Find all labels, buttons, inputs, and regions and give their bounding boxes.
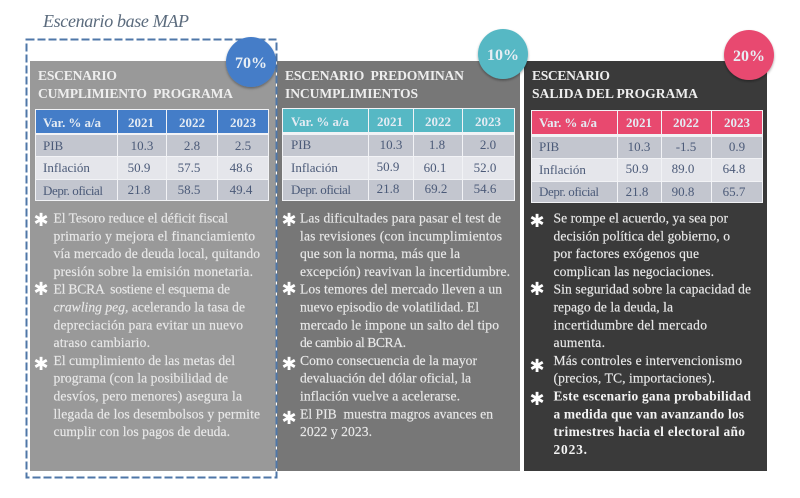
table: salida del programa: 2022 [673,115,699,130]
heading: predominan incumplimientos: INCUMPLIMIENTOS [285,86,418,101]
table: predominan incumplimientos: 60.1 [424,160,446,175]
table: salida del programa: 10.3 [628,139,650,154]
heading: salida del programa: ESCENARIO [532,68,610,83]
table: cumplimiento programa: 2023 [230,115,256,130]
bullets: predominan incumplimientos: Como consecuencia de la mayor [300,353,477,368]
table: cumplimiento programa: 10.3 [131,138,153,153]
heading: cumplimiento programa [38,68,233,101]
badge: 70% [226,37,276,87]
bullets: cumplimiento programa: presión sobre la emisión monetaria. [54,264,253,279]
table: cumplimiento programa: 2022 [179,115,205,130]
bullets: salida del programa: aumenta. [554,335,605,350]
table: cumplimiento programa: 58.5 [178,182,200,197]
bullets: salida del programa: complican las negociaciones. [554,264,714,279]
bullets: cumplimiento programa: programa (con la posibilidad de [54,371,228,387]
table: salida del programa: Var. % a/a [539,115,598,130]
bullets: predominan incumplimientos: ✱ [281,354,297,375]
heading: salida del programa [532,68,698,101]
bullets: cumplimiento programa: El cumplimiento de las metas del [54,353,235,368]
bullets: cumplimiento programa: primario y mejora el financiamiento [54,228,255,243]
table: predominan incumplimientos: 54.6 [474,181,497,196]
bullets: salida del programa: por factores exógenos que [554,246,699,261]
bullets: cumplimiento programa: crawling peg, acelerando la tasa de [54,300,245,314]
bullets: predominan incumplimientos: 2022 y 2023. [300,424,372,439]
badge: 10% [478,29,528,79]
table: cumplimiento programa: PIB [43,138,64,153]
title: Escenario base MAP [42,11,189,31]
bullets: predominan incumplimientos: excepción) reavivan la incertidumbre. [300,264,510,280]
bullets: salida del programa: Se rompe el acuerdo, ya sea por [554,210,728,226]
bullets: predominan incumplimientos [281,210,510,439]
table: salida del programa: 90.8 [672,184,694,199]
table: cumplimiento programa: 49.4 [230,182,253,197]
table: predominan incumplimientos: 50.9 [377,159,399,174]
table: salida del programa: 0.9 [729,139,745,154]
table: predominan incumplimientos: 52.0 [474,160,496,175]
table: predominan incumplimientos: 1.8 [429,137,445,152]
table: salida del programa: Depr. oficial [539,184,599,199]
bullets: salida del programa: decisión política del gobierno, o [554,228,730,243]
bullets: predominan incumplimientos: ✱ [281,408,297,429]
table: predominan incumplimientos: 2.0 [480,137,496,152]
bullets: cumplimiento programa: ✱ [33,210,49,231]
table: predominan incumplimientos: 10.3 [380,137,402,152]
bullets: cumplimiento programa: depreciación para evitar un nuevo [54,317,243,332]
table: salida del programa: 21.8 [626,184,648,199]
badge: 70%: 70% [235,55,267,72]
table: predominan incumplimientos [282,108,515,201]
bullets: salida del programa [529,210,752,457]
table: salida del programa: 50.9 [626,161,648,176]
bullets: salida del programa: 2023. [554,442,587,457]
heading: predominan incumplimientos: ESCENARIO PREDOMINAN [285,68,464,83]
bullets: salida del programa: incertidumbre del mercado [554,317,707,332]
table: salida del programa: Inflación [539,162,586,177]
bullets: predominan incumplimientos: Los temores del mercado lleven a un [300,282,502,297]
table: salida del programa: 89.0 [672,161,694,176]
table: salida del programa: 2021 [626,115,652,130]
bullets: predominan incumplimientos: ✱ [281,279,297,300]
bullets: salida del programa: ✱ [529,279,545,300]
table: predominan incumplimientos: 69.2 [425,181,447,196]
bullets: cumplimiento programa: llegada de los desembolsos y permite [54,406,260,421]
table: salida del programa: PIB [539,139,560,154]
table: salida del programa: -1.5 [676,139,696,154]
panel: escenario predominan incumplimientos [277,61,520,471]
bullets: cumplimiento programa: desvíos, pero menores) asegura la [54,388,242,404]
bullets: cumplimiento programa: El BCRA sostiene el esquema de [54,282,230,297]
bullets: cumplimiento programa: vía mercado de deuda local, quitando [54,246,260,261]
badge: 10%: 10% [487,47,519,64]
table: predominan incumplimientos: 2023 [475,114,502,129]
table: predominan incumplimientos: 2021 [377,114,403,129]
bullets: predominan incumplimientos: El PIB muestra magros avances en [300,406,493,421]
table: salida del programa: 64.8 [723,161,745,176]
table: cumplimiento programa: 2.5 [235,138,251,153]
bullets: cumplimiento programa: ✱ [33,279,49,300]
bullets: salida del programa: Más controles e intervencionismo [554,353,742,368]
bullets: cumplimiento programa: El Tesoro reduce el déficit fiscal [54,210,228,226]
heading: cumplimiento programa: CUMPLIMIENTO PROGRAMA [38,86,233,101]
table: predominan incumplimientos: PIB [291,137,312,152]
bullets: cumplimiento programa: ✱ [33,354,49,375]
heading: cumplimiento programa: ESCENARIO [38,68,117,83]
badge: 20% [724,30,774,80]
table: cumplimiento programa: Var. % a/a [43,115,102,130]
table: cumplimiento programa: 57.5 [178,160,200,175]
bullets: salida del programa: ✱ [529,356,545,377]
table: cumplimiento programa: 21.8 [128,182,150,197]
table: predominan incumplimientos: Inflación [291,160,338,175]
heading: salida del programa: SALIDA DEL PROGRAMA [532,86,698,101]
bullets: predominan incumplimientos: que son la norma, más que la [300,246,460,261]
panel: escenario salida del programa [524,61,767,471]
table: cumplimiento programa: 2021 [128,115,154,130]
bullets: predominan incumplimientos: mercado le impone un salto del tipo [300,317,499,332]
bullets: salida del programa: Este escenario gana probabilidad [554,388,752,404]
bullets: predominan incumplimientos: ✱ [281,210,297,231]
table: predominan incumplimientos: 21.8 [377,181,399,196]
bullets: predominan incumplimientos: inflación vuelve a acelerarse. [300,388,460,404]
bullets: predominan incumplimientos: nuevo episodio de volatilidad. El [300,300,479,314]
table: cumplimiento programa: 50.9 [128,160,150,175]
bullets: salida del programa: Sin seguridad sobre la capacidad de [554,282,751,297]
table: salida del programa: 65.7 [723,184,746,199]
bullets: salida del programa: trimestres hacia el electoral año [554,424,745,439]
bullets: cumplimiento programa: atraso cambiario. [54,335,150,350]
bullets: cumplimiento programa: cumplir con los pagos de deuda. [54,424,230,439]
table: predominan incumplimientos: Depr. oficial [291,182,351,197]
table: salida del programa [531,110,763,203]
table: salida del programa: 2023 [724,115,750,130]
bullets: salida del programa: ✱ [529,389,545,410]
table: predominan incumplimientos: Var. % a/a [291,114,350,129]
bullets: salida del programa: a medida que van avanzando los [554,406,744,421]
bullets: predominan incumplimientos: las revisiones (con incumplimientos [300,228,502,244]
table: cumplimiento programa: Depr. oficial [43,183,103,198]
heading: predominan incumplimientos [285,68,464,101]
panel: escenario cumplimiento programa [30,61,276,471]
bullets: predominan incumplimientos: devaluación del dólar oficial, la [300,371,471,386]
bullets: salida del programa: repago de la deuda, la [554,300,673,314]
bullets: predominan incumplimientos: de cambio al BCRA. [300,335,406,350]
table: cumplimiento programa: 2.8 [184,138,200,153]
bullets: predominan incumplimientos: Las dificultades para pasar el test de [300,210,501,226]
table: cumplimiento programa: 48.6 [230,160,253,175]
bullets: salida del programa: ✱ [529,211,545,232]
base scenario dashed frame [26,40,276,478]
table: predominan incumplimientos: 2022 [425,114,451,129]
table: cumplimiento programa: Inflación [43,160,90,175]
bullets: salida del programa: (precios, TC, importaciones). [554,371,715,387]
badge: 20%: 20% [733,48,765,65]
table: cumplimiento programa [35,109,269,201]
bullets: cumplimiento programa [33,210,260,439]
